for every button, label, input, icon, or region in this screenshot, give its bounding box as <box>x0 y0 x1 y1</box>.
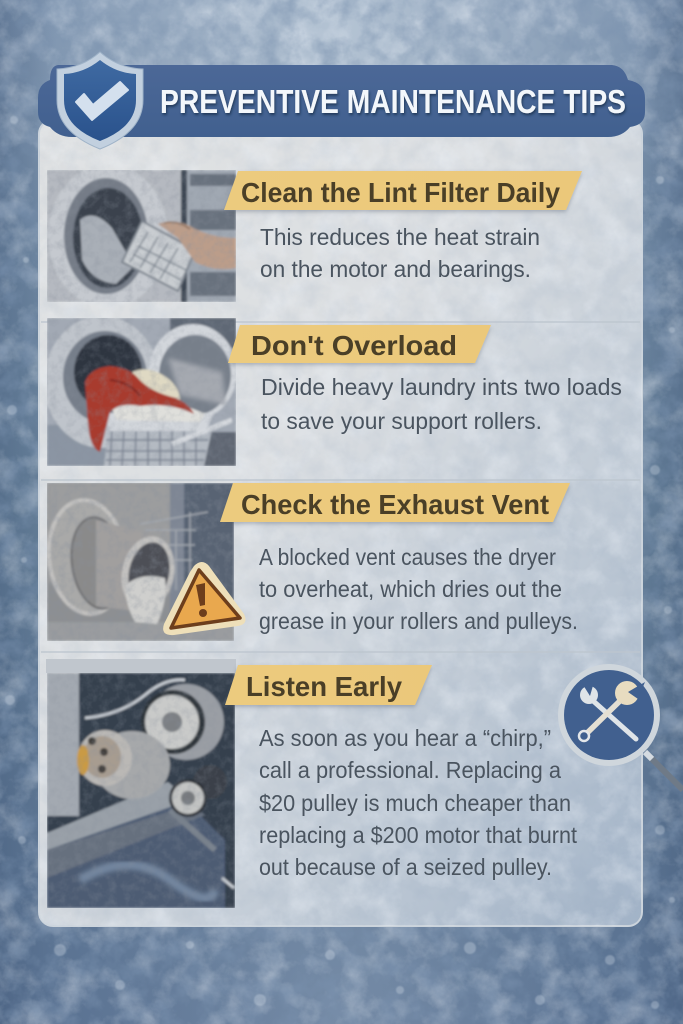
tip text: exhaust vent: A blocked vent causes the dryer <box>259 544 556 570</box>
tip text: exhaust vent <box>259 544 578 634</box>
tip text: exhaust vent: grease in your rollers and pulleys. <box>259 608 578 634</box>
panel: tips card <box>39 120 642 926</box>
tip text: listen early: replacing a $200 motor that burnt <box>259 822 577 848</box>
photo: clogged exhaust vent <box>43 483 234 641</box>
tip text: lint filter <box>260 224 540 282</box>
ribbon heading: Clean the Lint Filter Daily: Clean the Lint Filter Daily <box>241 177 560 208</box>
tip text: overload: Divide heavy laundry ints two loads <box>261 374 622 400</box>
tip text: overload <box>261 374 622 434</box>
tip text: listen early: As soon as you hear a “chirp,” <box>259 725 551 751</box>
ribbon heading: Listen Early <box>225 665 432 705</box>
title banner <box>38 65 645 137</box>
tip text: exhaust vent: to overheat, which dries out the <box>259 576 562 602</box>
tip text: lint filter: on the motor and bearings. <box>260 256 531 282</box>
row dividers <box>41 322 640 652</box>
photo: overloaded laundry basket <box>44 316 237 466</box>
icon: warning triangle <box>163 562 246 635</box>
tip text: overload: to save your support rollers. <box>261 408 542 434</box>
ribbon heading: Check the Exhaust Vent: Check the Exhaust Vent <box>241 489 549 520</box>
photo: lint filter being removed from dryer <box>47 164 236 308</box>
tip text: listen early: call a professional. Replacing a <box>259 757 562 783</box>
ribbon heading: Don't Overload: Don't Overload <box>251 330 457 361</box>
tip text: listen early: out because of a seized pulley. <box>259 854 552 880</box>
ribbon heading: Don't Overload <box>228 325 491 363</box>
icon: shield with check <box>57 52 143 149</box>
tip text: listen early: $20 pulley is much cheaper than <box>259 790 571 816</box>
photo: dryer pulleys and belt <box>46 659 236 908</box>
tip text: listen early <box>259 725 577 880</box>
tip text: lint filter: This reduces the heat strain <box>260 224 540 250</box>
icon: magnifier with crossed wrenches <box>558 664 683 790</box>
ribbon heading: Listen Early: Listen Early <box>246 671 402 702</box>
